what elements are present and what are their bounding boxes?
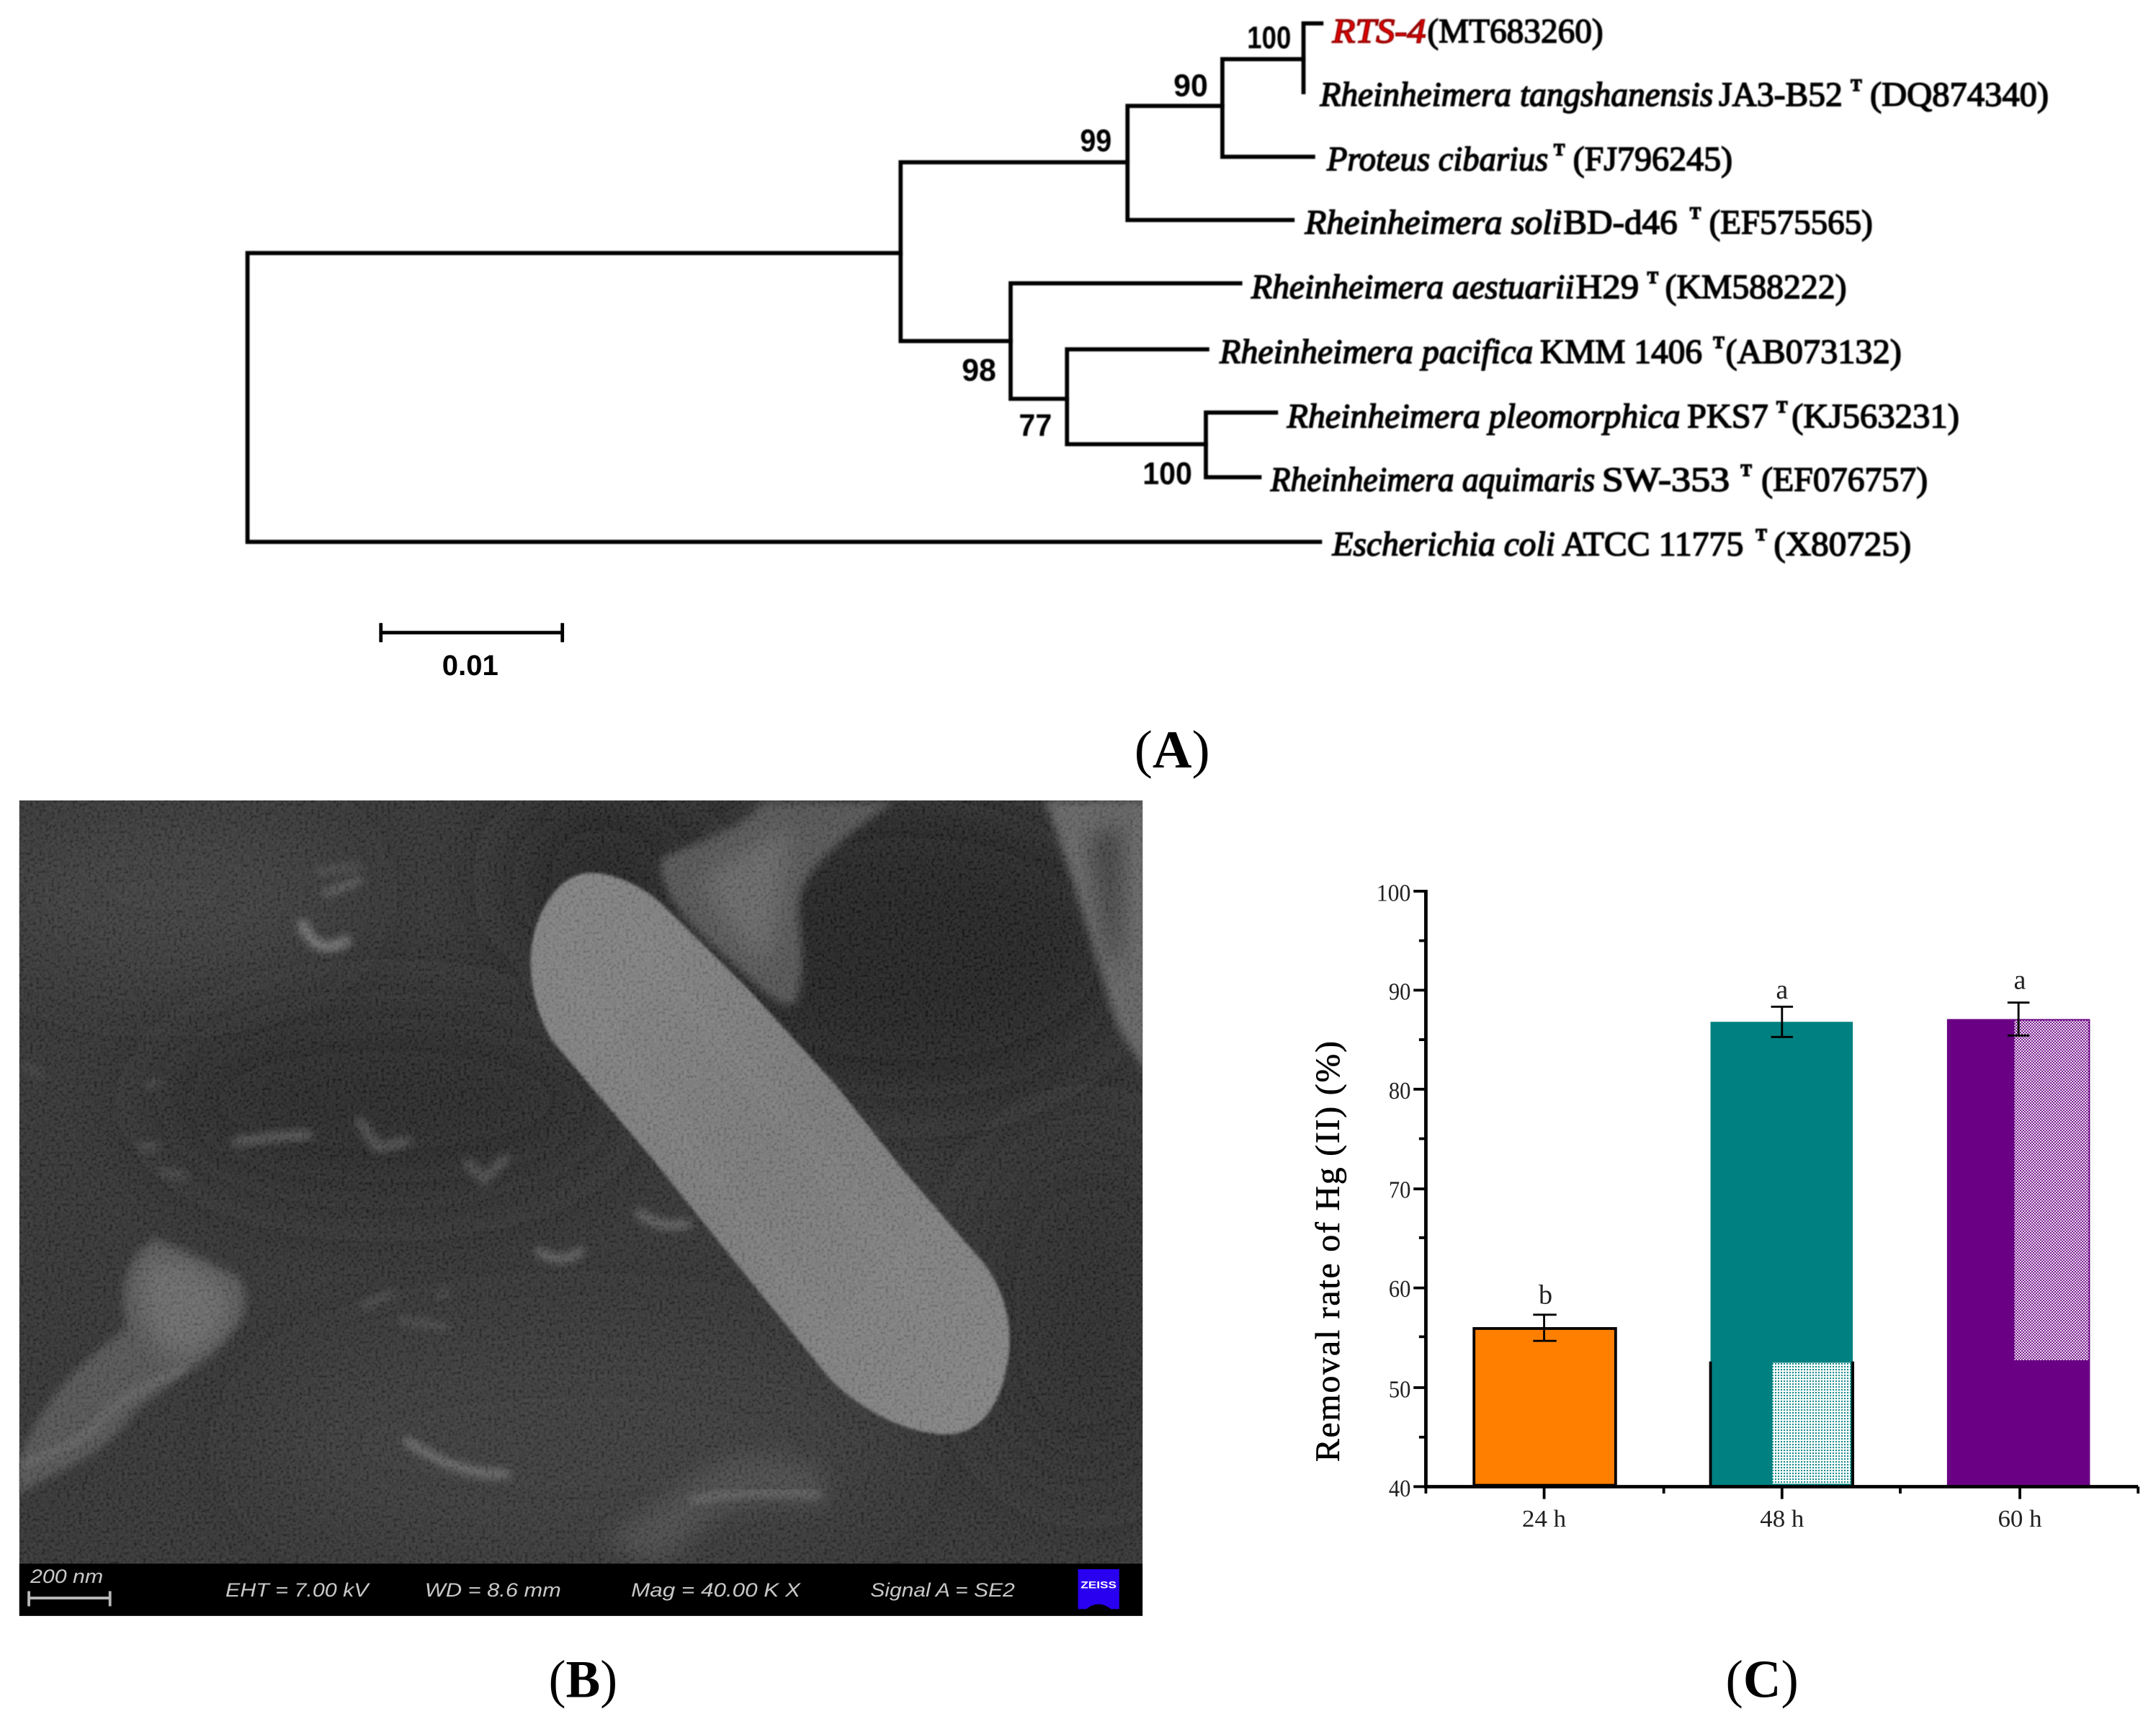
label: R. pleomorphica: (KJ563231) [1792, 398, 1959, 436]
label: R. aestuarii: (KM588222) [1665, 268, 1847, 306]
significance letters [1539, 965, 2026, 1311]
label: R. pacifica: (AB073132) [1726, 333, 1902, 371]
significance letters: b [1539, 1280, 1552, 1311]
label: Proteus cibarius: T [1554, 141, 1565, 159]
label: E. coli [1332, 525, 1911, 563]
bootstrap values: 98 [962, 353, 996, 388]
label: Proteus cibarius [1326, 140, 1732, 179]
label: E. coli: ATCC 11775 [1562, 525, 1743, 563]
info bar [19, 1563, 1142, 1616]
label: R. aquimaris [1270, 460, 1928, 499]
icon: Zeiss logo [1078, 1569, 1119, 1609]
significance letters: a [2014, 965, 2026, 995]
label: R. aquimaris: SW-353 [1602, 460, 1730, 499]
info bar: EHT = 7.00 kV [225, 1579, 370, 1601]
bootstrap values: 99 [1080, 123, 1111, 159]
bootstrap values: 77 [1019, 408, 1052, 443]
label: R. aquimaris: Rheinheimera aquimaris [1270, 460, 1595, 499]
label: R. aquimaris: (EF076757) [1761, 460, 1928, 499]
label: R. pacifica: T [1713, 334, 1725, 352]
label: R. tangshanensis: T [1851, 76, 1862, 94]
y tick labels: 80 [1389, 1077, 1410, 1104]
label: E. coli: Escherichia coli [1332, 525, 1555, 563]
panel: SEM micrograph (B) [0, 784, 1210, 1616]
label: R. tangshanensis: Rheinheimera tangshanensis [1319, 76, 1713, 114]
label: Proteus cibarius: (FJ796245) [1573, 140, 1732, 179]
y tick labels: 50 [1389, 1375, 1410, 1403]
bootstrap values: 100 [1247, 20, 1291, 55]
label: E. coli: (X80725) [1773, 525, 1911, 563]
bacterial cell [531, 872, 1010, 1434]
info bar: Mag = 40.00 K X [631, 1579, 801, 1601]
panel label C: (C) [1726, 1651, 1799, 1710]
panel: bar chart (C) [1309, 879, 2138, 1532]
y tick labels: 70 [1389, 1177, 1410, 1204]
label: R. aestuarii: Rheinheimera aestuarii [1251, 268, 1575, 306]
bar 48 h [1711, 1022, 1853, 1486]
label: E. coli: T [1756, 526, 1767, 544]
label: R. soli: T [1690, 205, 1701, 223]
x tick labels: 48 h [1760, 1505, 1804, 1532]
label: R. aestuarii: H29 [1575, 268, 1639, 306]
SEM background [0, 784, 1210, 1616]
label: R. soli: Rheinheimera soli [1304, 204, 1562, 242]
sensor noise [19, 800, 1142, 1563]
label: R. pacifica: KMM 1406 [1540, 333, 1702, 371]
error bars [1533, 1003, 2029, 1341]
significance letters: a [1776, 975, 1788, 1005]
label: R. tangshanensis: JA3-B52 [1719, 76, 1843, 114]
tree branches [248, 23, 1321, 542]
debris top right [1045, 800, 1148, 1076]
label: RTS-4 [1332, 12, 1603, 50]
surface flecks [24, 867, 687, 1474]
label: R. soli: BD-d46 [1563, 204, 1678, 242]
bootstrap values: 100 [1142, 456, 1192, 491]
debris left [14, 1238, 246, 1496]
panel: phylogenetic tree (A) [248, 12, 2049, 682]
label: R. pacifica [1219, 333, 1902, 371]
debris bottom [605, 1455, 825, 1561]
label: R. aestuarii [1251, 268, 1847, 306]
y tick labels: 40 [1389, 1475, 1410, 1502]
label: R. pleomorphica: T [1776, 398, 1787, 416]
bar 24 h [1474, 1329, 1616, 1486]
axes [1413, 890, 2138, 1499]
SEM scale bar [29, 1592, 110, 1607]
label: R. soli [1304, 204, 1873, 242]
label: Proteus cibarius: Proteus cibarius [1326, 140, 1548, 179]
scale bar 0.01: 0.01 [442, 650, 498, 682]
bootstrap values: 90 [1173, 68, 1208, 104]
label: R. pleomorphica: Rheinheimera pleomorphica [1287, 398, 1681, 436]
label: R. tangshanensis [1319, 76, 2049, 114]
panel label B: (B) [549, 1651, 617, 1710]
label: R. aquimaris: T [1741, 461, 1752, 479]
x tick labels: 60 h [1998, 1505, 2042, 1532]
label: R. soli: (EF575565) [1709, 204, 1873, 242]
label: RTS-4: (MT683260) [1427, 12, 1603, 50]
y axis title: Removal rate of Hg (II) (%) [1309, 1041, 1347, 1462]
y tick labels [1377, 879, 1410, 1502]
y tick labels: 90 [1389, 978, 1410, 1006]
x tick labels [1522, 1505, 2042, 1532]
bar 60 h [1947, 1019, 2090, 1486]
icon: Zeiss logo: ZEISS [1081, 1580, 1117, 1591]
x tick labels: 24 h [1522, 1505, 1566, 1532]
info bar: Signal A = SE2 [870, 1579, 1015, 1601]
taxon labels [1219, 12, 2049, 563]
y tick labels: 60 [1389, 1275, 1410, 1303]
scale bar 0.01 [381, 623, 563, 682]
panel label A: (A) [1135, 720, 1210, 780]
label: R. pacifica: Rheinheimera pacifica [1219, 333, 1533, 371]
bootstrap values [962, 20, 1291, 491]
y tick labels: 100 [1377, 879, 1410, 906]
label: RTS-4: RTS-4 [1332, 12, 1426, 50]
label: R. pleomorphica: PKS7 [1687, 398, 1768, 436]
label: R. aestuarii: T [1647, 269, 1658, 287]
info bar: WD = 8.6 mm [425, 1579, 561, 1601]
label: R. tangshanensis: (DQ874340) [1870, 76, 2049, 114]
info bar: 200 nm [30, 1566, 103, 1587]
label: R. pleomorphica [1287, 398, 1959, 436]
debris behind the cell [660, 802, 894, 1005]
